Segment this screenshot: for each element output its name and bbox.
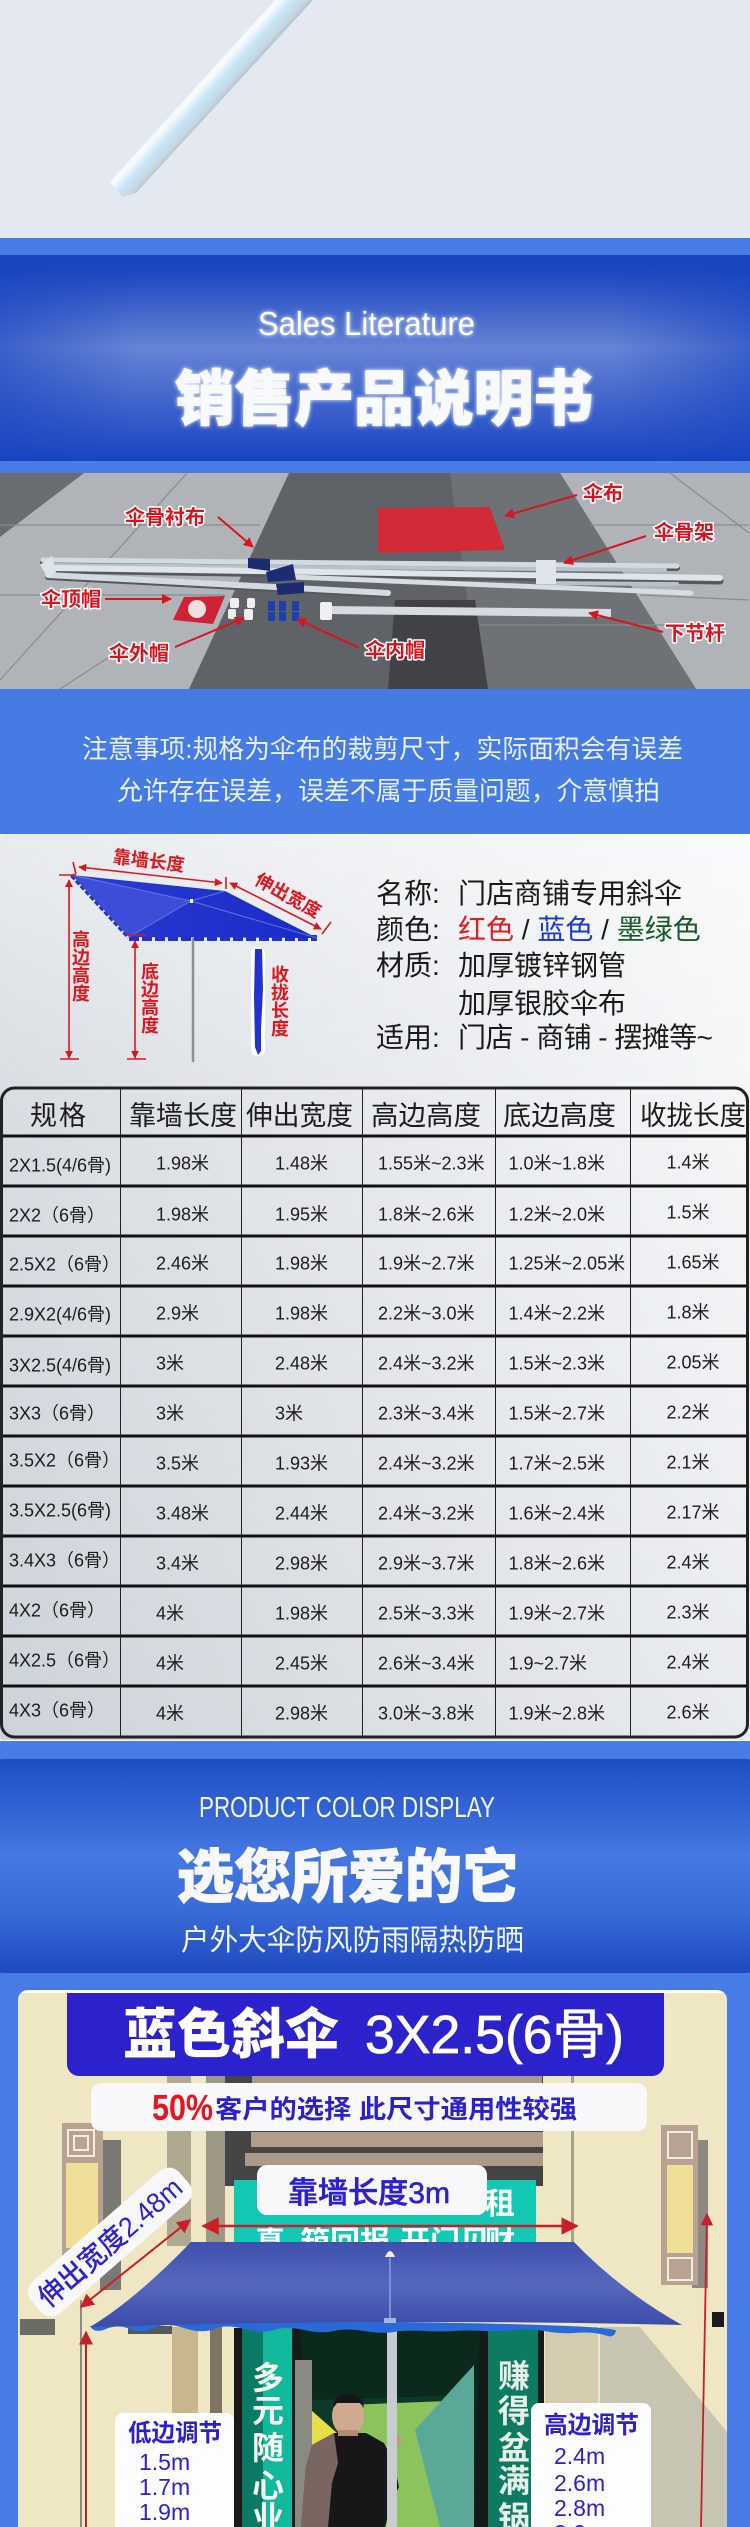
white outer caps — [228, 598, 255, 620]
row: 3.5X2.5: 3.48米 — [156, 1504, 209, 1524]
blue canopy — [90, 2242, 682, 2336]
row: 2X2: 1.5米 — [666, 1202, 710, 1222]
text block: product attributes: 加厚银胶伞布 — [458, 988, 626, 1019]
row: 3X3: 3米 — [275, 1404, 303, 1424]
row: 3.4X3: 2.9米~3.7米 — [378, 1554, 475, 1574]
right teal pillar with slogan: 满 — [498, 2463, 530, 2499]
row: 4X2.5: 2.45米 — [275, 1654, 328, 1674]
label: high edge adjustment — [531, 2403, 651, 2527]
row: 3.5X2: 1.7米~2.5米 — [508, 1454, 605, 1474]
row: 3.4X3: 3.4米 — [156, 1554, 199, 1574]
table header row — [30, 1101, 746, 1131]
teal shop sign: 真 — [255, 2226, 285, 2259]
label: high edge adjustment: 2.6m — [554, 2470, 605, 2496]
right teal pillar with slogan — [488, 2328, 538, 2527]
row: 2.9X2: 2.9X2(4/6骨) — [9, 1304, 111, 1324]
row: 3X2.5: 2.48米 — [275, 1354, 328, 1374]
row: 2X2 — [9, 1202, 710, 1226]
label: high edge adjustment: 2.4m — [554, 2443, 605, 2469]
row: 4X2: 2.3米 — [666, 1602, 710, 1622]
left teal pillar with slogan — [242, 2328, 292, 2527]
folded red canopy — [378, 507, 505, 553]
table header row: 规格 — [30, 1101, 86, 1131]
row: 4X2.5: 2.6米~3.4米 — [378, 1654, 475, 1674]
panel: product color display banner — [0, 1741, 750, 2527]
header bar: blue umbrella size — [67, 1993, 664, 2076]
dimension label: high edge height: 度 — [72, 984, 90, 1004]
row: 3.5X2.5 — [9, 1500, 720, 1524]
row: 2X1.5: 1.55米~2.3米 — [378, 1154, 485, 1174]
row: 2X2: 1.2米~2.0米 — [508, 1204, 605, 1224]
diagram: umbrella dimensions — [59, 847, 331, 1062]
row: 3X3 — [9, 1402, 710, 1424]
lower pole — [325, 610, 611, 613]
umbrella pole — [387, 2328, 397, 2527]
row: 3.5X2.5: 2.4米~3.2米 — [378, 1504, 475, 1524]
teal shop sign — [234, 2180, 536, 2242]
tagline: 户外大伞防风防雨隔热防晒 — [181, 1924, 524, 1957]
row: 2X2: 1.8米~2.6米 — [378, 1204, 475, 1224]
table header row: 收拢长度 — [640, 1101, 746, 1131]
dimension label: wall length: 靠墙长度 — [112, 847, 186, 875]
right teal pillar with slogan: 赚 — [498, 2358, 530, 2394]
row: 3.4X3: 2.98米 — [275, 1554, 328, 1574]
part labels: 伞外帽 — [109, 641, 169, 665]
dimension label: high edge height: 高 — [72, 929, 90, 950]
label: low edge adjustment: 1.7m — [139, 2474, 190, 2500]
row: 2.9X2: 1.98米 — [275, 1304, 328, 1324]
callout arrows — [105, 495, 663, 648]
dimension label: extension width: 伸出宽度 — [252, 869, 325, 922]
table header row: 高边高度 — [371, 1101, 481, 1131]
teal shop sign: 财 — [485, 2226, 515, 2259]
label: extension width 2.48m: 伸出宽度2.48m — [32, 2172, 188, 2313]
text block: product attributes — [376, 878, 713, 1053]
teal shop sign: 开门见 — [400, 2226, 490, 2259]
row: 3.5X2: 2.1米 — [666, 1452, 710, 1472]
row: 4X2: 1.98米 — [275, 1604, 328, 1624]
row: 3.4X3: 1.8米~2.6米 — [508, 1554, 605, 1574]
roof cap cloth — [173, 596, 225, 624]
row: 3X3: 1.5米~2.7米 — [508, 1404, 605, 1424]
row: 2.5X2 — [9, 1252, 720, 1274]
panel: top product photo with pole — [0, 0, 750, 238]
dimension label: low edge height: 底 — [141, 961, 159, 982]
panel: sales literature banner — [0, 238, 750, 473]
row: 2.5X2: 1.98米 — [275, 1254, 328, 1274]
text block: product attributes: 门店 - 商铺 - 摆摊等~ — [458, 1022, 713, 1053]
row: 3X3: 2.3米~3.4米 — [378, 1404, 475, 1424]
left teal pillar with slogan: 多 — [252, 2360, 284, 2396]
wall length double arrow — [203, 2225, 577, 2227]
notice line 1: 注意事项:规格为伞布的裁剪尺寸，实际面积会有误差 — [82, 734, 683, 764]
label: wall length 3m — [257, 2165, 487, 2215]
dimension label: high edge height: 高 — [72, 965, 90, 986]
dimension label: low edge height: 高 — [141, 997, 159, 1018]
row: 3X3: 2.2米 — [666, 1402, 710, 1422]
heading: 销售产品说明书: 销售产品说明书 — [175, 366, 593, 433]
part labels: 下节杆 — [665, 622, 725, 645]
row: 3X2.5: 1.5米~2.3米 — [508, 1354, 605, 1374]
wall lamp right — [661, 2125, 708, 2288]
part labels — [41, 481, 725, 665]
umbrella pole — [192, 938, 194, 1062]
part labels: 伞布 — [583, 481, 623, 505]
row: 3X2.5: 3米 — [156, 1354, 184, 1374]
part labels: 伞骨架 — [654, 520, 714, 544]
text block: product attributes: 门店商铺专用斜伞 — [458, 878, 682, 909]
subtitle: PRODUCT COLOR DISPLAY: PRODUCT COLOR DISPLAY — [199, 1792, 495, 1824]
text block: product attributes: 红色 / 蓝色 / 墨绿色 — [458, 914, 701, 945]
low edge arrow left — [81, 2300, 86, 2527]
row: 2X1.5 — [9, 1152, 710, 1176]
row: 2.9X2: 2.9米 — [156, 1304, 199, 1324]
icon: aluminium pole end — [110, 0, 313, 197]
label: low edge adjustment — [115, 2413, 234, 2527]
dimension label: high edge height: 边 — [72, 948, 90, 968]
row: 4X2: 1.9米~2.7米 — [508, 1604, 605, 1624]
row: 2.9X2: 1.8米 — [666, 1302, 710, 1322]
row: 3.5X2 — [9, 1450, 710, 1474]
row: 3X2.5: 3X2.5(4/6骨) — [9, 1356, 111, 1376]
storefront header — [225, 2076, 543, 2186]
small wall signs — [20, 2312, 724, 2335]
panel: blue umbrella product photo — [18, 1990, 727, 2527]
row: 2X1.5: 1.0米~1.8米 — [508, 1154, 605, 1174]
row: 2X1.5: 1.98米 — [156, 1154, 209, 1174]
umbrella frame poles — [40, 556, 720, 595]
row: 2X1.5: 1.48米 — [275, 1154, 328, 1174]
row: 4X3: 4米 — [156, 1704, 184, 1724]
row: 4X3: 1.9米~2.8米 — [508, 1704, 605, 1724]
row: 3X3: 3X3（6骨） — [9, 1404, 105, 1424]
row: 2X1.5: 1.4米 — [666, 1152, 710, 1172]
table grid — [2, 1088, 748, 1737]
row: 3.5X2.5: 1.6米~2.4米 — [508, 1504, 605, 1524]
dimension label: low edge height: 边 — [141, 980, 159, 1000]
row: 4X2.5: 1.9~2.7米 — [508, 1654, 587, 1674]
wall shadow — [600, 2327, 727, 2527]
part labels: 伞骨衬布 — [125, 505, 205, 529]
heading: 选您所爱的它: 选您所爱的它 — [177, 1845, 519, 1910]
row: 2.5X2: 1.65米 — [666, 1252, 720, 1272]
left teal pillar with slogan: 心 — [252, 2468, 284, 2504]
row: 4X3: 3.0米~3.8米 — [378, 1704, 475, 1724]
row: 2.9X2: 1.4米~2.2米 — [508, 1304, 605, 1324]
row: 3.4X3: 2.4米 — [666, 1552, 710, 1572]
text block: product attributes: 材质: — [376, 950, 440, 981]
strip: 50% customers choice: 客户的选择 此尺寸通用性较强 — [215, 2095, 577, 2124]
row: 2.9X2 — [9, 1302, 710, 1324]
dimension label: folded length: 度 — [271, 1019, 289, 1039]
row: 4X2.5 — [9, 1650, 710, 1674]
text block: product attributes: 适用: — [376, 1022, 440, 1053]
row: 2X2: 2X2（6骨） — [9, 1206, 105, 1226]
row: 4X2.5: 2.4米 — [666, 1652, 710, 1672]
row: 2X2: 1.95米 — [275, 1204, 328, 1224]
row: 3.5X2.5: 2.17米 — [666, 1502, 720, 1522]
label: high edge adjustment: 2.8m — [554, 2495, 605, 2521]
panel: specification background — [0, 834, 750, 1740]
right teal pillar with slogan: 得 — [498, 2393, 530, 2429]
dimension label: folded length: 长 — [271, 1001, 289, 1021]
row: 3X2.5 — [9, 1352, 720, 1376]
row: 4X3: 2.6米 — [666, 1702, 710, 1722]
high edge arrow right — [701, 2214, 707, 2527]
row: 3.5X2: 3.5米 — [156, 1454, 199, 1474]
row: 4X3 — [9, 1700, 710, 1724]
wall lamp left — [62, 2123, 121, 2290]
row: 3X2.5: 2.4米~3.2米 — [378, 1354, 475, 1374]
blue inner caps — [268, 601, 299, 621]
row: 4X2: 4米 — [156, 1604, 184, 1624]
row: 2.9X2: 2.2米~3.0米 — [378, 1304, 475, 1324]
left teal pillar with slogan: 元 — [252, 2393, 284, 2429]
left teal pillar with slogan: 随 — [252, 2430, 284, 2466]
row: 2X1.5: 2X1.5(4/6骨) — [9, 1156, 111, 1176]
table header row: 底边高度 — [503, 1101, 616, 1131]
row: 3X3: 3米 — [156, 1404, 184, 1424]
strip: 50% customers choice: 50% — [152, 2087, 213, 2128]
person holding pole — [301, 2394, 401, 2527]
teal shop sign: 箱回报 — [300, 2226, 390, 2259]
row: 2.5X2: 2.46米 — [156, 1254, 209, 1274]
label: low edge adjustment: 1.9m — [139, 2499, 190, 2525]
row: 2.5X2: 2.5X2（6骨） — [9, 1254, 120, 1274]
dimension label: folded length: 拢 — [271, 983, 289, 1003]
label: low edge adjustment: 1.5m — [139, 2449, 190, 2475]
doorway — [234, 2328, 544, 2527]
row: 4X3: 4X3（6骨） — [9, 1700, 105, 1720]
header bar: blue umbrella size: 蓝色斜伞 — [123, 2005, 339, 2065]
row: 3.5X2: 3.5X2（6骨） — [9, 1450, 120, 1470]
row: 3.5X2.5: 2.44米 — [275, 1504, 328, 1524]
label: wall length 3m: 靠墙长度3m — [288, 2177, 450, 2210]
part labels: 伞内帽 — [365, 638, 425, 662]
row: 4X2: 2.5米~3.3米 — [378, 1604, 475, 1624]
row: 4X2.5: 4米 — [156, 1654, 184, 1674]
row: 4X2 — [9, 1600, 710, 1624]
row: 3X2.5: 2.05米 — [666, 1352, 720, 1372]
notice line 2: 允许存在误差，误差不属于质量问题，介意慎拍 — [117, 776, 660, 806]
panel: notice text — [0, 689, 750, 834]
row: 2.5X2: 1.25米~2.05米 — [508, 1254, 625, 1274]
table header row: 伸出宽度 — [246, 1101, 353, 1131]
canopy — [72, 875, 317, 938]
text block: product attributes: 颜色: — [376, 914, 440, 945]
row: 4X3: 2.98米 — [275, 1704, 328, 1724]
row: 2.5X2: 1.9米~2.7米 — [378, 1254, 475, 1274]
extension diagonal arrow — [81, 2220, 190, 2307]
right teal pillar with slogan: 盆 — [498, 2430, 530, 2466]
row: 3.4X3 — [9, 1550, 710, 1574]
collapsed umbrella — [251, 947, 265, 1056]
row: 4X2: 4X2（6骨） — [9, 1600, 105, 1620]
table header row: 靠墙长度 — [129, 1101, 237, 1131]
teal shop sign: 租 — [485, 2188, 515, 2221]
header bar: blue umbrella size: 3X2.5(6骨) — [365, 2005, 624, 2065]
dimension arrows — [59, 862, 331, 1059]
wall columns — [167, 2076, 574, 2417]
subtitle: Sales Literature: Sales Literature — [258, 305, 475, 342]
row: 3.4X3: 3.4X3（6骨） — [9, 1550, 120, 1570]
row: 4X2.5: 4X2.5（6骨） — [9, 1650, 120, 1670]
row: 2X2: 1.98米 — [156, 1204, 209, 1224]
text block: product attributes: 名称: — [376, 878, 440, 909]
table: size specifications — [2, 1088, 748, 1737]
part labels: 伞顶帽 — [41, 587, 101, 611]
text block: product attributes: 加厚镀锌钢管 — [458, 950, 626, 981]
label: high edge adjustment: 高边调节 — [544, 2412, 639, 2439]
strip: 50% customers choice — [91, 2083, 647, 2131]
dimension label: low edge height: 度 — [141, 1016, 159, 1036]
label: low edge adjustment: 低边调节 — [128, 2420, 222, 2447]
row: 3.5X2: 2.4米~3.2米 — [378, 1454, 475, 1474]
row: 3.5X2: 1.93米 — [275, 1454, 328, 1474]
row: 3.5X2.5: 3.5X2.5(6骨) — [9, 1500, 111, 1520]
panel: parts photo on paved floor — [0, 473, 750, 689]
dimension label: folded length: 收 — [271, 965, 289, 985]
